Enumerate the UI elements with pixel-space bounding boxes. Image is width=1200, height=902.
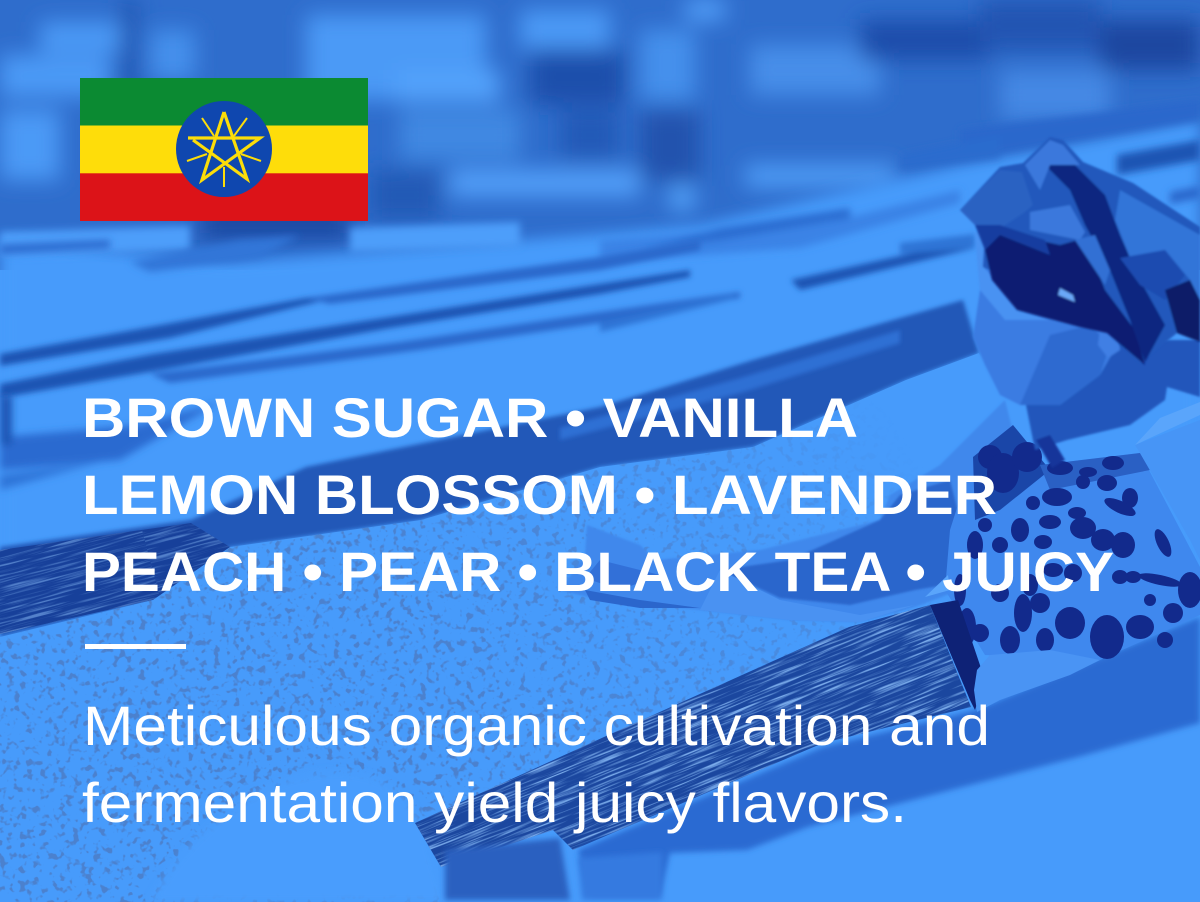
- worker: neck and face: [973, 225, 1200, 468]
- description text: [82, 694, 990, 834]
- description text: fermentation yield juicy flavors.: [82, 771, 907, 834]
- worker: patterned top: [925, 402, 1200, 712]
- worker: black band and hand: [930, 600, 985, 710]
- flavor notes heading: [82, 386, 1114, 603]
- flag stripes: [80, 78, 368, 221]
- foreground: blurred bed edge and shadows: [445, 617, 1200, 900]
- Ethiopian flag: [80, 78, 368, 221]
- flavor notes heading: LEMON BLOSSOM • LAVENDER: [82, 463, 997, 526]
- background: blurred upper racks: [0, 0, 1200, 270]
- woven drying net, behind the beans: [0, 300, 979, 637]
- worker: right sleeve: [1135, 420, 1200, 560]
- worker: reaching arm and hand: [560, 400, 1020, 622]
- divider rule: [85, 644, 186, 649]
- flavor notes heading: PEACH • PEAR • BLACK TEA • JUICY: [82, 540, 1114, 603]
- worker: headscarf: [960, 137, 1200, 365]
- coffee beans bed: [0, 340, 1020, 902]
- background: sunlit drying bed bands: [0, 100, 1200, 620]
- foreground blurred bed: [150, 772, 445, 902]
- flavor notes heading: BROWN SUGAR • VANILLA: [82, 386, 858, 449]
- woven net, foreground: [415, 605, 971, 867]
- flag emblem: blue disc and star: [176, 101, 272, 197]
- description text: Meticulous organic cultivation and: [83, 694, 990, 757]
- background: rack shadow at left: [0, 395, 220, 490]
